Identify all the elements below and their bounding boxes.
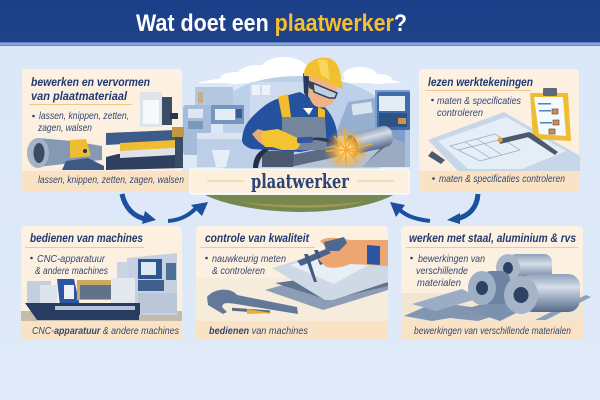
icon: pipe and press machines xyxy=(27,92,184,170)
panel: bewerken en vervormen van plaatmateriaal xyxy=(22,69,189,191)
panel: bewerken en vervormen van plaatmateriaal: bewerken en vervormen xyxy=(31,75,150,89)
panel: bedienen van machines: & andere machines xyxy=(35,265,109,277)
panel: bewerken en vervormen van plaatmateriaal: zagen, walsen xyxy=(37,122,92,134)
panel: lezen werktekeningen: maten & specificaties controleren xyxy=(439,173,565,185)
panel: lezen werktekeningen: controleren xyxy=(437,107,483,119)
head xyxy=(307,76,337,107)
arrow: right down to werken met staal xyxy=(447,194,478,224)
panel: bedienen van machines: CNC-apparatuur & andere machines xyxy=(32,325,180,337)
glove and torch xyxy=(261,129,300,150)
panel: werken met staal, aluminium & rvs: verschillende xyxy=(416,265,468,277)
panel: controle van kwaliteit: nauwkeurig meten xyxy=(212,253,286,265)
panel: werken met staal, aluminium & rvs: werken met staal, aluminium & rvs xyxy=(409,231,576,245)
central illustration: plaatwerker xyxy=(183,57,410,172)
workpiece and bench xyxy=(277,136,405,167)
icon: caliper, hand and steel sheets xyxy=(207,237,388,314)
panel: bedienen van machines: CNC-apparatuur xyxy=(37,253,105,265)
panel: lezen werktekeningen: maten & specificaties xyxy=(437,95,522,107)
panel: controle van kwaliteit: bedienen van machines xyxy=(209,325,309,337)
panel: controle van kwaliteit xyxy=(196,226,388,340)
hard hat xyxy=(304,58,343,89)
icon: CNC machine xyxy=(21,253,182,321)
panel: lezen werktekeningen: lezen werktekeningen xyxy=(428,75,533,89)
title: Wat doet een plaatwerker? xyxy=(136,10,407,37)
central label: plaatwerker xyxy=(190,169,409,194)
icon: blueprint and clipboard xyxy=(428,88,580,171)
left machines xyxy=(183,87,253,167)
panel: bedienen van machines: bedienen van machines xyxy=(30,231,143,245)
spark xyxy=(324,128,368,172)
panel: bedienen van machines xyxy=(21,226,182,340)
panel: werken met staal, aluminium & rvs: materialen xyxy=(417,277,461,289)
arrow: left down to bedienen van machines xyxy=(122,194,156,224)
panel: werken met staal, aluminium & rvs xyxy=(401,226,591,340)
arrow: left up to plaatwerker xyxy=(168,202,208,221)
right machines xyxy=(335,90,410,167)
torso xyxy=(242,92,338,152)
panel: werken met staal, aluminium & rvs: bewerkingen van xyxy=(418,253,485,265)
panel: bewerken en vervormen van plaatmateriaal: lassen, knippen, zetten, xyxy=(39,110,129,122)
panel: bewerken en vervormen van plaatmateriaal: van plaatmateriaal xyxy=(31,89,128,103)
panel: bewerken en vervormen van plaatmateriaal: lassen, knippen, zetten, zagen, walsen xyxy=(38,174,184,186)
central label: plaatwerker: plaatwerker xyxy=(251,169,349,193)
clouds and sky xyxy=(197,57,403,84)
header banner xyxy=(0,0,600,46)
icon: steel coils and sheets xyxy=(404,254,591,321)
panel: lezen werktekeningen xyxy=(419,69,580,191)
panel: controle van kwaliteit: controle van kwaliteit xyxy=(205,231,310,245)
grass mound xyxy=(205,195,393,212)
arrow: right up to plaatwerker xyxy=(390,202,430,221)
panel: controle van kwaliteit: & controleren xyxy=(212,265,265,277)
